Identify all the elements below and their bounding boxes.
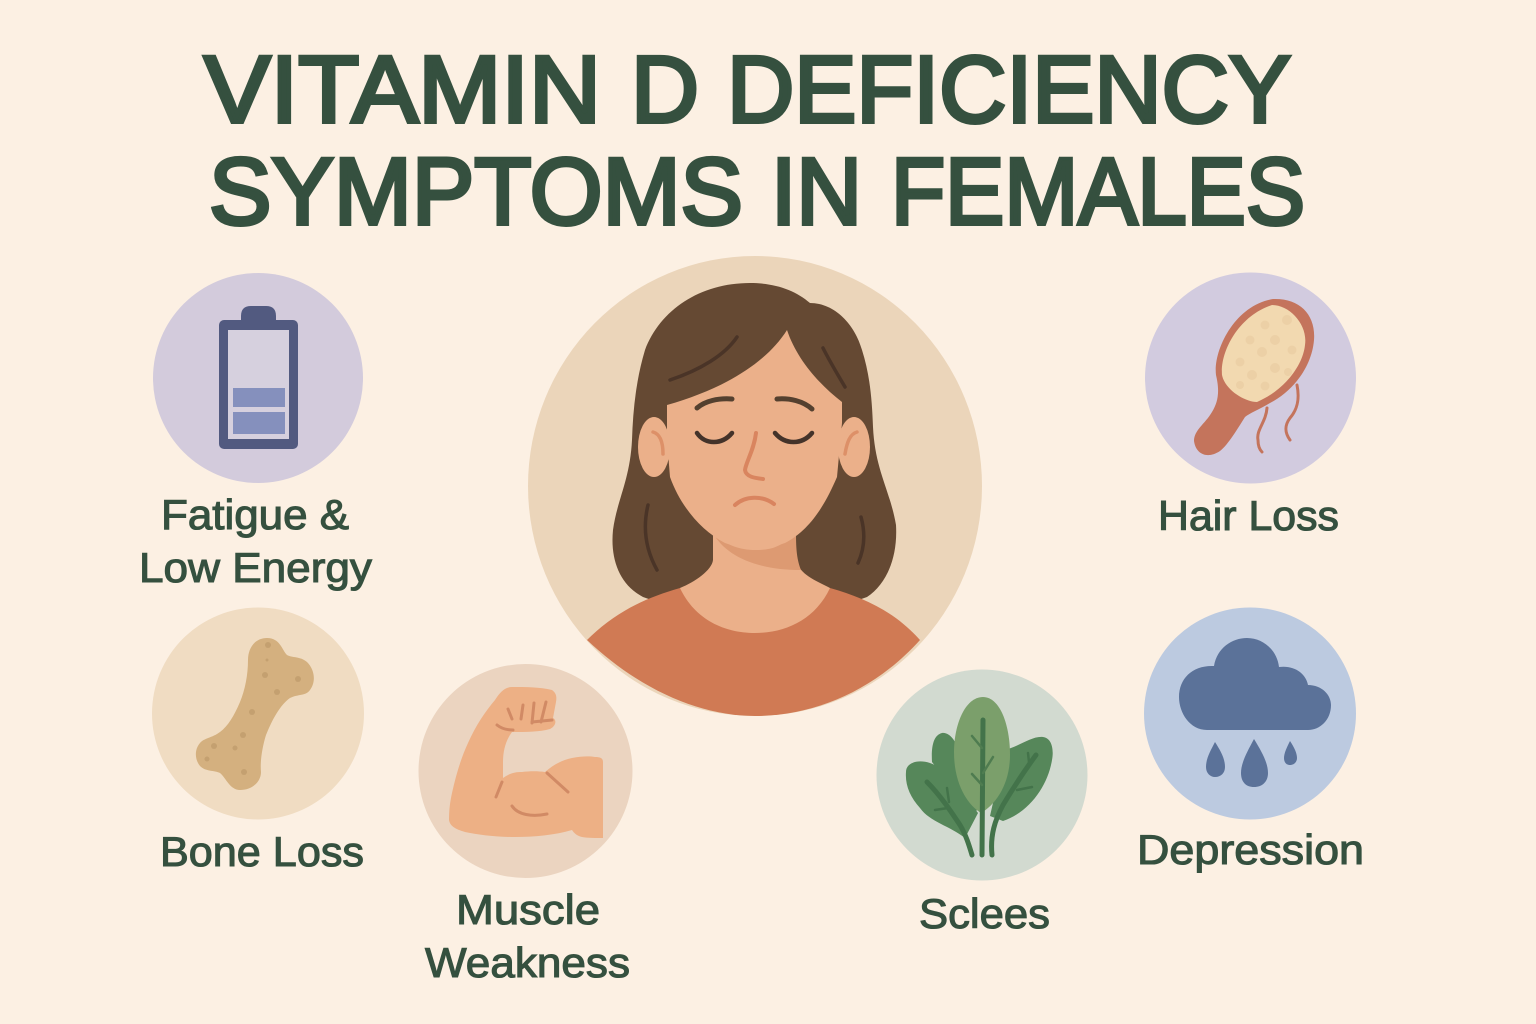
icon: spinach leaves — [876, 670, 1088, 880]
symptom: depression — [1137, 608, 1364, 873]
neck shadow — [713, 533, 801, 570]
central portrait: woman with sad expression — [528, 256, 982, 716]
label: Fatigue & — [161, 491, 349, 538]
label: Sclees — [919, 890, 1050, 937]
symptom: sclees — [876, 670, 1088, 937]
title: D — [631, 37, 699, 143]
icon: low battery — [153, 273, 363, 483]
icon: rain cloud — [1144, 608, 1356, 820]
symptom: muscle weakness — [418, 664, 632, 986]
icon: flexed arm — [418, 664, 632, 878]
face — [667, 330, 842, 548]
icon: hairbrush with hair — [1145, 272, 1356, 484]
hair strands — [645, 337, 864, 570]
back left leaf — [932, 733, 985, 815]
icon: bone — [152, 608, 364, 820]
eyebrows — [697, 399, 812, 409]
title: IN — [771, 139, 862, 245]
shirt — [587, 588, 920, 716]
label: Depression — [1137, 826, 1364, 873]
title — [204, 37, 1305, 245]
hair — [612, 283, 896, 610]
closed eyes — [697, 433, 812, 442]
neck — [680, 530, 830, 633]
label — [139, 491, 372, 591]
title: SYMPTOMS — [209, 139, 743, 245]
title: FEMALES — [891, 139, 1305, 245]
title: DEFICIENCY — [727, 37, 1291, 143]
symptom: fatigue and low energy — [139, 273, 372, 591]
nose and mouth — [745, 433, 763, 479]
label: Hair Loss — [1158, 492, 1339, 539]
label — [425, 886, 630, 986]
label: Low Energy — [139, 544, 372, 591]
label: Muscle — [456, 886, 600, 933]
symptom: bone loss — [152, 608, 364, 875]
symptom: hair loss — [1145, 272, 1356, 539]
ears — [638, 417, 670, 477]
centre leaf — [954, 697, 1010, 813]
label: Weakness — [425, 939, 630, 986]
front left leaf — [906, 761, 978, 838]
right leaf — [990, 737, 1053, 821]
label: Bone Loss — [160, 828, 364, 875]
title: VITAMIN — [204, 37, 601, 143]
